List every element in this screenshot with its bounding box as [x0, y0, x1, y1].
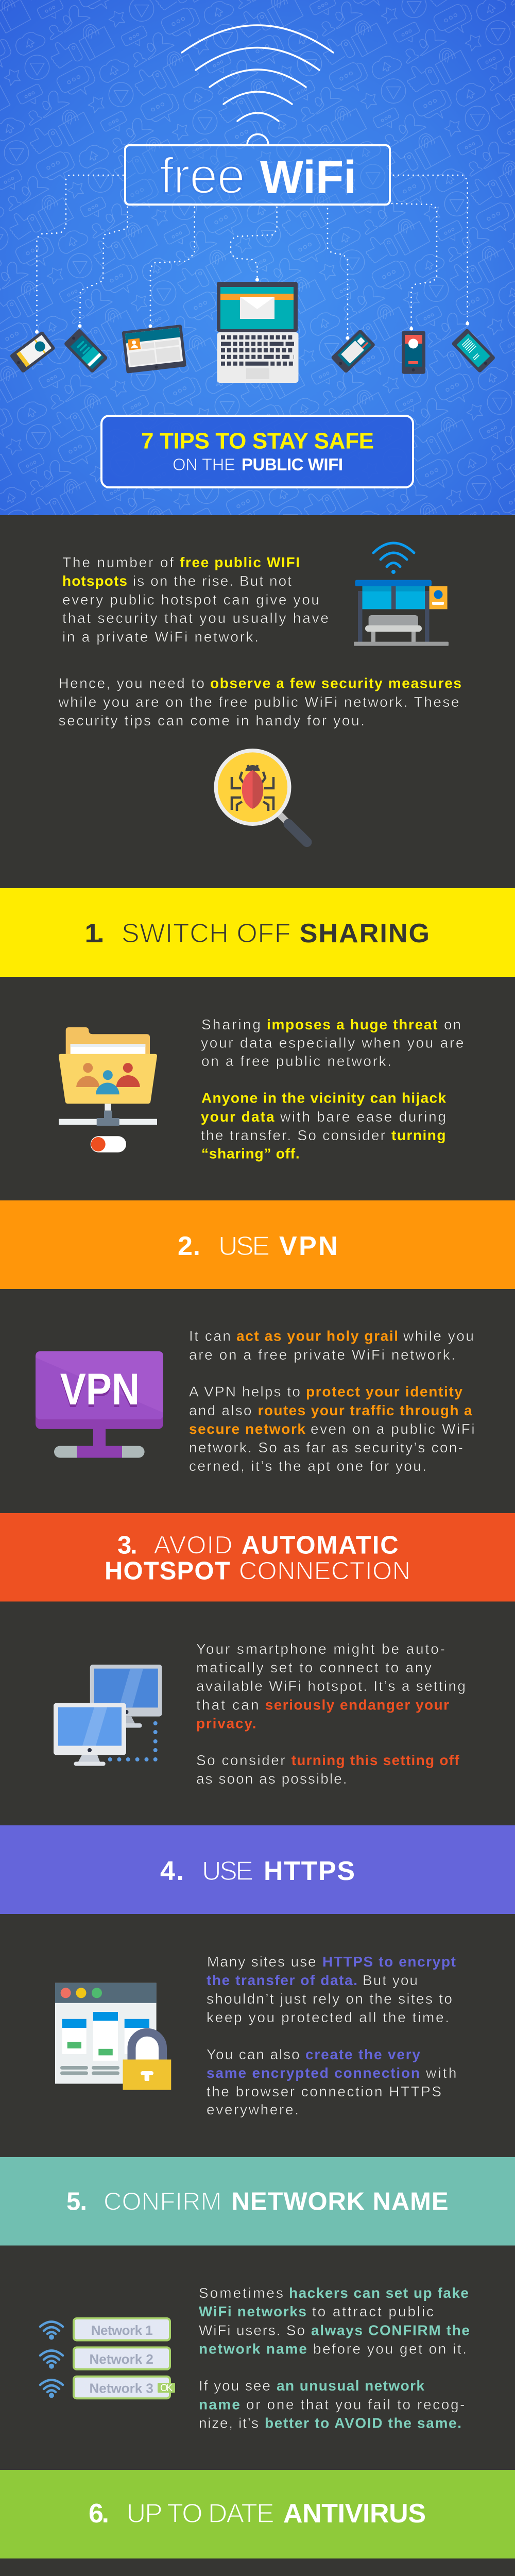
icon: wifi network list: Network 3: [90, 2380, 153, 2396]
heading band: tip 6 up to date antivirus: [0, 2470, 515, 2558]
text block: intro paragraph 1: [62, 554, 329, 645]
text block: tip 3 body: Your smartphone might be auto-: [196, 1641, 445, 1657]
icon: wifi network list: OK: [160, 2383, 173, 2394]
text block: tip 1 body: Sharing: [201, 1016, 261, 1032]
icon: phone 1: [9, 331, 56, 374]
icon: vpn monitor: [36, 1351, 163, 1458]
heading band: tip 3 avoid automatic hotspot connection: [0, 1513, 515, 1601]
text block: intro paragraph 1: The number of: [62, 554, 174, 570]
text block: tip 3 body: available WiFi hotspot. It’s a setting: [196, 1678, 466, 1694]
text block: tip 1 body: with bare ease during: [280, 1109, 446, 1125]
icon: vpn monitor: VPN: [60, 1365, 140, 1414]
text block: intro paragraph 2: [58, 675, 461, 728]
text block: tip 4 body: same encrypted connection: [207, 2065, 420, 2081]
text block: tip 3 body: matically set to connect to any: [196, 1659, 432, 1675]
text block: intro paragraph 1: in a private WiFi network.: [62, 629, 259, 645]
text block: tip 1 body: your data: [201, 1109, 274, 1125]
text block: tip 5 body: network name: [199, 2341, 307, 2357]
icon: phone 2: [63, 328, 108, 374]
panel: hero background: [0, 0, 515, 515]
text block: tip 4 body: the browser connection HTTPS: [207, 2083, 441, 2099]
heading band: tip 1 switch off sharing: 1.: [85, 919, 105, 948]
text block: tip 5 body: name: [199, 2397, 240, 2412]
text block: tip 4 body: But you: [363, 1972, 418, 1988]
text block: tip 4 body: keep you protected all the time.: [207, 2009, 449, 2025]
text block: tip 4 body: create the very: [305, 2046, 420, 2062]
text block: tip 3 body: seriously endanger your: [265, 1697, 449, 1713]
text block: tip 5 body: always CONFIRM the: [311, 2322, 470, 2338]
icon: wifi network list: Network 1: [91, 2323, 153, 2338]
text block: intro paragraph 1: hotspots: [62, 573, 127, 589]
text block: intro paragraph 1: that security that you usually have: [62, 610, 329, 626]
title: free WiFi: [125, 145, 390, 205]
icon: wifi signal arcs: [182, 25, 333, 145]
text block: tip 1 body: Anyone in the vicinity can hijack: [201, 1090, 446, 1106]
text block: tip 5 body: nize, it’s: [199, 2415, 259, 2431]
icon: vpn monitor: VPN: [60, 1367, 140, 1417]
text block: tip 3 body: as soon as possible.: [196, 1771, 347, 1787]
text block: tip 5 body: hackers can set up fake: [289, 2285, 469, 2301]
heading band: tip 5 confirm network name: [0, 2157, 515, 2245]
heading band: tip 4 use https: USE: [202, 1856, 253, 1886]
text block: tip 2 body: and also: [189, 1402, 251, 1418]
text block: tip 1 body: on: [444, 1016, 461, 1032]
text block: tip 2 body: act as your holy grail: [236, 1328, 398, 1344]
text block: tip 2 body: secure network: [189, 1421, 305, 1437]
heading band: tip 3 avoid automatic hotspot connection: HOTSPOT: [105, 1557, 230, 1585]
heading band: tip 3 avoid automatic hotspot connection: AVOID: [153, 1531, 233, 1559]
text block: tip 5 body: to attract public: [312, 2303, 434, 2319]
text block: tip 2 body: even on a public WiFi: [311, 1421, 475, 1437]
title: free WiFi: WiFi: [260, 152, 356, 204]
icon: wifi network list: Network 2: [90, 2351, 153, 2367]
heading band: tip 3 avoid automatic hotspot connection: CONNECTION: [239, 1557, 410, 1585]
icon: wifi network list: [40, 2318, 175, 2398]
text block: tip 5 body: WiFi users. So: [199, 2322, 305, 2338]
text block: tip 4 body: Many sites use: [207, 1954, 316, 1970]
heading band: tip 3 avoid automatic hotspot connection: AUTOMATIC: [242, 1531, 399, 1559]
heading band: tip 4 use https: 4.: [160, 1856, 184, 1886]
heading band: tip 1 switch off sharing: SWITCH OFF: [122, 919, 290, 948]
icon: phone 3: [331, 329, 375, 374]
text block: intro paragraph 1: every public hotspot can give you: [62, 591, 319, 608]
text block: tip 5 body: If you see: [199, 2378, 270, 2394]
text block: tip 2 body: routes your traffic through a: [258, 1402, 472, 1418]
text block: tip 4 body: [207, 1954, 456, 2117]
dotted connector lines: [37, 175, 468, 338]
callout: 7 tips to stay safe: PUBLIC WIFI: [242, 455, 343, 474]
icon: two connected monitors: [54, 1665, 162, 1766]
text block: intro paragraph 2: while you are on the free public WiFi network. These: [58, 694, 459, 710]
text block: tip 5 body: better to AVOID the same.: [265, 2415, 461, 2431]
text block: tip 1 body: on a free public network.: [201, 1053, 391, 1069]
callout: 7 tips to stay safe: ON THE: [173, 455, 235, 474]
heading band: tip 2 use vpn: [0, 1200, 515, 1289]
text block: tip 1 body: “sharing” off.: [201, 1146, 300, 1161]
title: free WiFi: free: [160, 147, 245, 204]
text block: tip 1 body: imposes a huge threat: [267, 1016, 438, 1032]
text block: tip 5 body: or one that you fail to recog-: [246, 2397, 465, 2412]
heading band: tip 3 avoid automatic hotspot connection: 3.: [117, 1531, 138, 1559]
heading band: tip 6 up to date antivirus: 6.: [89, 2499, 109, 2529]
text block: intro paragraph 1: is on the rise. But not: [133, 573, 291, 589]
text block: tip 4 body: the transfer of data.: [207, 1972, 357, 1988]
heading band: tip 1 switch off sharing: SHARING: [300, 919, 430, 948]
panel: dark body background: [0, 515, 515, 2576]
icon: bug under magnifying glass: [214, 749, 307, 842]
text block: tip 2 body: are on a free private WiFi network.: [189, 1347, 455, 1363]
heading band: tip 4 use https: [0, 1825, 515, 1914]
text block: intro paragraph 1: free public WIFI: [180, 554, 300, 570]
heading band: tip 6 up to date antivirus: ANTIVIRUS: [283, 2499, 426, 2529]
text block: tip 2 body: It can: [189, 1328, 231, 1344]
text block: tip 1 body: turning: [391, 1127, 446, 1143]
text block: tip 2 body: A VPN helps to: [189, 1384, 300, 1400]
heading band: tip 5 confirm network name: 5.: [66, 2188, 87, 2216]
text block: tip 5 body: WiFi networks: [199, 2303, 306, 2319]
text block: tip 2 body: while you: [403, 1328, 474, 1344]
text block: intro paragraph 2: Hence, you need to: [59, 675, 204, 691]
callout: 7 tips to stay safe: [101, 416, 413, 487]
text block: tip 4 body: You can also: [207, 2046, 300, 2062]
heading band: tip 5 confirm network name: NETWORK NAME: [232, 2188, 449, 2216]
heading band: tip 2 use vpn: USE: [218, 1231, 270, 1261]
icon: phone 4: [402, 331, 425, 374]
text block: tip 5 body: an unusual network: [277, 2378, 424, 2394]
icon: bus stop with wifi: [354, 543, 449, 646]
text block: tip 4 body: everywhere.: [207, 2102, 299, 2117]
heading band: tip 1 switch off sharing: [0, 888, 515, 977]
text block: tip 3 body: [196, 1641, 466, 1787]
connector end dots: [35, 278, 469, 340]
text block: tip 2 body: cerned, it’s the apt one for you.: [189, 1458, 426, 1474]
text block: tip 5 body: [199, 2285, 470, 2431]
text block: tip 3 body: turning this setting off: [291, 1752, 459, 1768]
text block: intro paragraph 2: security tips can come in handy for you.: [59, 713, 365, 728]
text block: tip 2 body: network. So as far as security’s con-: [189, 1439, 463, 1455]
heading band: tip 2 use vpn: 2.: [178, 1231, 200, 1261]
heading band: tip 4 use https: HTTPS: [264, 1856, 355, 1886]
text block: tip 4 body: HTTPS to encrypt: [322, 1954, 456, 1970]
heading band: tip 6 up to date antivirus: UP TO DATE: [127, 2499, 274, 2529]
text block: tip 5 body: Sometimes: [199, 2285, 283, 2301]
text block: tip 2 body: protect your identity: [306, 1384, 462, 1400]
heading band: tip 5 confirm network name: CONFIRM: [104, 2188, 221, 2216]
icon: browser window with padlock: [55, 1983, 171, 2090]
icon: tablet: [122, 325, 186, 374]
text block: tip 1 body: your data especially when you are: [201, 1035, 464, 1051]
icon: phone 5: [451, 328, 496, 373]
text block: tip 3 body: that can: [196, 1697, 259, 1713]
text block: tip 3 body: privacy.: [196, 1716, 256, 1732]
text block: tip 4 body: shouldn’t just rely on the sites to: [207, 1991, 452, 2007]
heading band: tip 2 use vpn: VPN: [279, 1231, 338, 1261]
text block: tip 5 body: before you get on it.: [313, 2341, 467, 2357]
text block: tip 1 body: [201, 1016, 464, 1161]
icon: shared folder on network with toggle: [59, 1027, 157, 1153]
text block: tip 2 body: [189, 1328, 475, 1474]
text block: intro paragraph 2: observe a few security measures: [210, 675, 461, 691]
text block: tip 4 body: with: [425, 2065, 456, 2081]
callout: 7 tips to stay safe: 7 TIPS TO STAY SAFE: [141, 429, 374, 454]
text block: tip 3 body: So consider: [196, 1752, 285, 1768]
icon: laptop: [217, 282, 299, 383]
text block: tip 1 body: the transfer. So consider: [201, 1127, 385, 1143]
